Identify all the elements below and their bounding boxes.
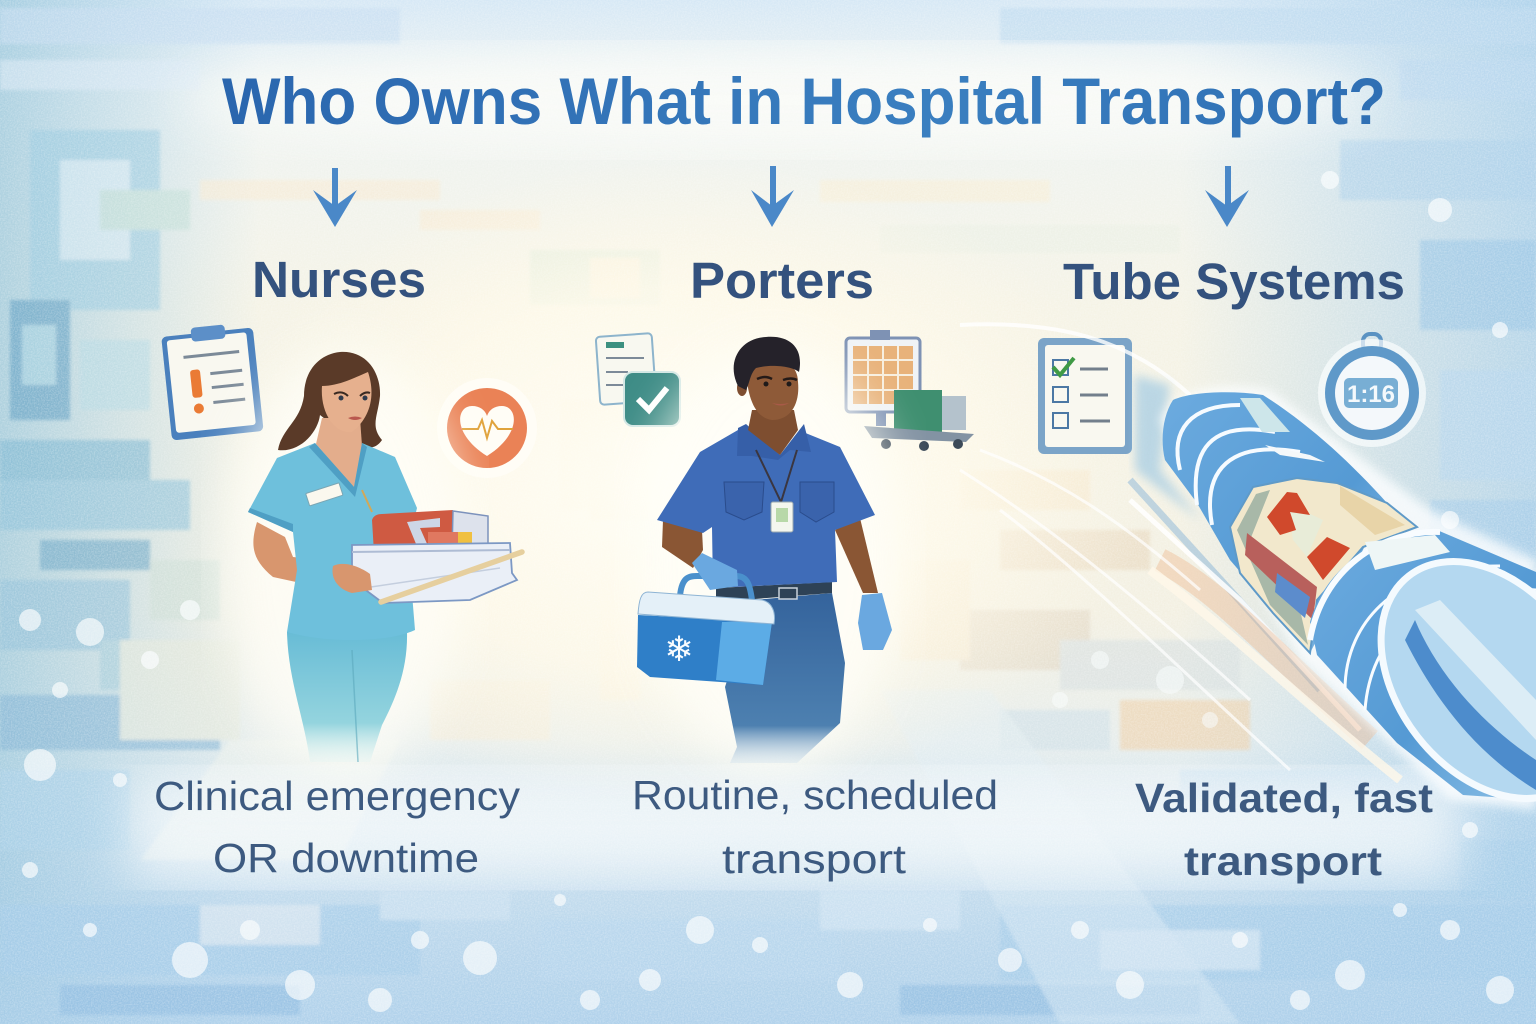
tray stick bbox=[381, 552, 522, 602]
rear tube section bbox=[1163, 392, 1387, 653]
caption: nurses: OR downtime bbox=[213, 835, 479, 881]
neck bbox=[316, 418, 362, 488]
heading: Nurses: Nurses bbox=[252, 251, 426, 308]
trousers bbox=[725, 593, 845, 763]
arm bbox=[253, 522, 368, 593]
icon: checklist bbox=[1038, 338, 1132, 454]
streaks bbox=[960, 324, 1400, 780]
figure: nurse bbox=[225, 350, 522, 770]
arrow: to tube systems bbox=[1205, 166, 1249, 227]
icon: stopwatch 1:16: 1:16 bbox=[1347, 381, 1395, 408]
carrier window bbox=[1230, 478, 1417, 653]
caption: nurses: Clinical emergency bbox=[154, 773, 521, 819]
glow around tube bbox=[1160, 387, 1536, 810]
name badge bbox=[306, 483, 343, 506]
white halo bbox=[225, 350, 465, 770]
icon: heart monitor bbox=[437, 378, 537, 478]
trousers bbox=[287, 632, 407, 762]
shirt bbox=[657, 430, 875, 588]
tube system illustration bbox=[960, 324, 1536, 841]
caption: porters: transport bbox=[722, 836, 907, 882]
right arm bbox=[835, 518, 878, 593]
heading: Tube Systems: Tube Systems bbox=[1063, 253, 1405, 310]
belt bbox=[716, 582, 832, 602]
icon: clipboard with alert bbox=[161, 321, 264, 441]
heading: Porters: Porters bbox=[690, 252, 874, 309]
figure: porter bbox=[637, 337, 900, 770]
white halo bbox=[640, 350, 900, 770]
icon: stopwatch 1:16 bbox=[1318, 334, 1426, 447]
caption: porters: Routine, scheduled bbox=[632, 772, 998, 818]
scrub top bbox=[248, 443, 417, 640]
arrow: to nurses bbox=[313, 168, 357, 227]
caption: tube systems bbox=[1135, 775, 1433, 884]
supply tray contents bbox=[372, 510, 453, 553]
caption: tube systems: transport bbox=[1184, 838, 1382, 884]
head bbox=[746, 358, 798, 420]
tube mouth bbox=[1336, 519, 1536, 841]
tray box bbox=[352, 543, 517, 603]
sample carrier bbox=[1245, 492, 1350, 620]
snowflake: ❄ bbox=[664, 630, 694, 669]
neck bbox=[748, 410, 798, 455]
hand bbox=[332, 564, 372, 593]
right glove bbox=[858, 593, 892, 650]
icon: checklist with check badge bbox=[596, 333, 680, 426]
caption: nurses bbox=[154, 773, 521, 881]
face bbox=[322, 372, 371, 432]
front tube section bbox=[1310, 530, 1536, 800]
left arm bbox=[662, 520, 703, 568]
icon: schedule board with cart bbox=[846, 330, 974, 451]
caption: porters bbox=[632, 772, 998, 882]
caption: tube systems: Validated, fast bbox=[1135, 775, 1433, 821]
lanyard bbox=[362, 490, 372, 512]
cooler bbox=[637, 553, 774, 685]
title: Who Owns What in Hospital Transport? bbox=[222, 64, 1386, 138]
arrow: to porters bbox=[751, 166, 794, 227]
warm glow bbox=[210, 160, 1150, 800]
lanyard badge bbox=[756, 450, 797, 502]
hair bbox=[278, 352, 382, 450]
